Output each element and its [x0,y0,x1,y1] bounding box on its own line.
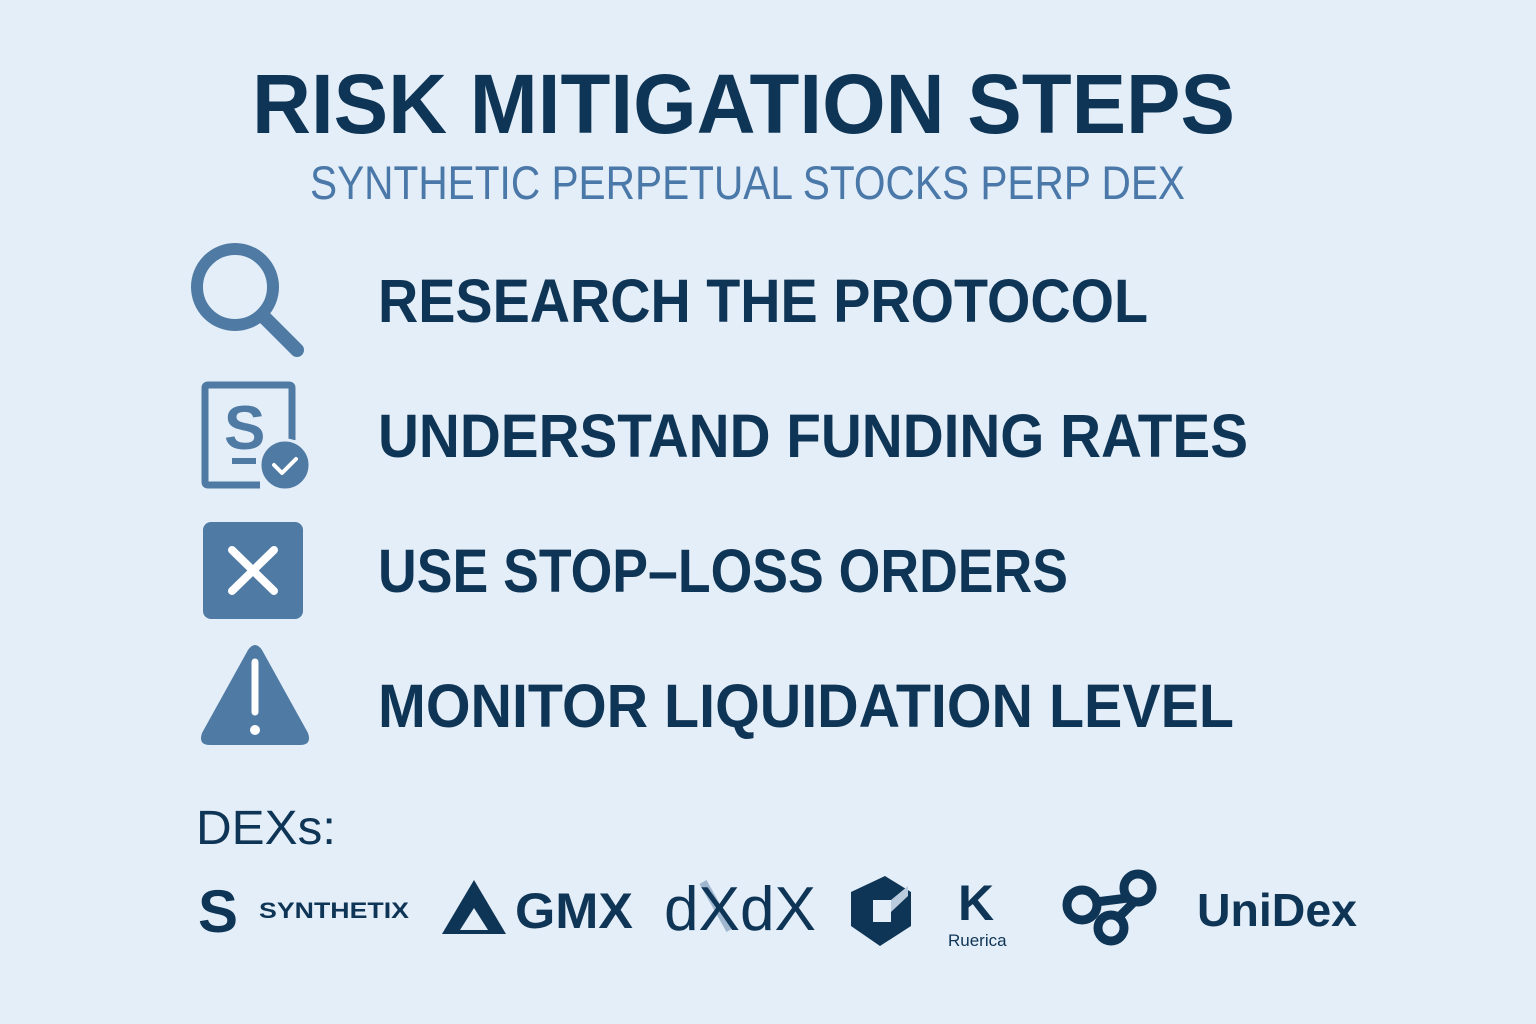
logo: gmx [442,880,633,939]
step 4 text: MONITOR LIQUIDATION LEVEL [378,672,1234,740]
logos row [198,874,1357,950]
icon: warning [201,645,309,745]
logo: gmx: GMX [515,883,633,939]
logo: synthetix: S [198,878,238,945]
DEXs label: DEXs: [196,802,336,855]
logo: synthetix: SYNTHETIX [259,898,409,923]
logo: network [1067,874,1152,941]
logo: ruerica [948,875,1007,950]
icon: funding document: S [224,394,265,463]
logo: synthetix [198,878,409,945]
logo: dydx: dXdX [664,875,816,944]
logo: ruerica: K [958,875,994,931]
logo: hexagon [851,876,911,946]
subtitle: SYNTHETIC PERPETUAL STOCKS PERP DEX [310,156,1185,209]
logo: ruerica: Ruerica [948,931,1007,950]
icon: funding document [205,385,310,490]
title: RISK MITIGATION STEPS [252,57,1235,151]
logo: unidex: UniDex [1197,884,1357,936]
step 2 text: UNDERSTAND FUNDING RATES [378,402,1248,470]
step 3 text: USE STOP–LOSS ORDERS [378,537,1068,605]
icon: magnifier [197,249,297,350]
icon: stop box [203,522,303,619]
step 1 text: RESEARCH THE PROTOCOL [378,267,1148,335]
